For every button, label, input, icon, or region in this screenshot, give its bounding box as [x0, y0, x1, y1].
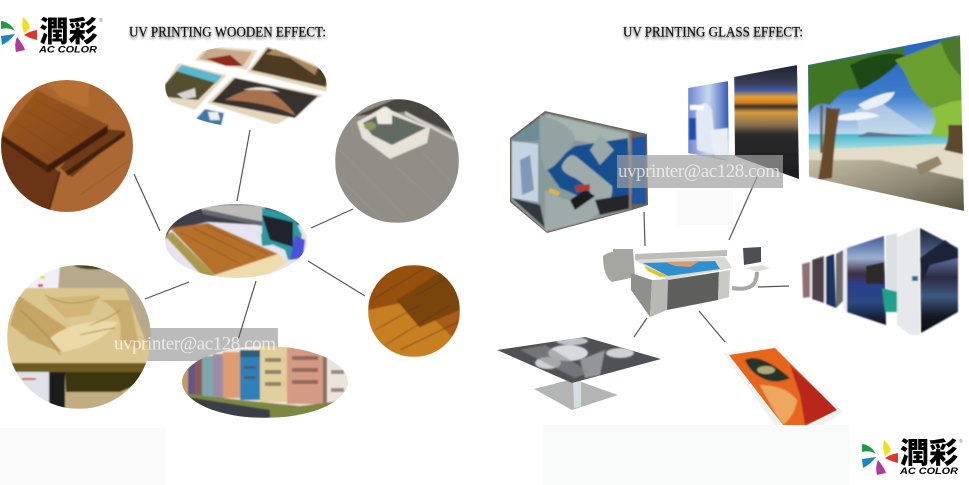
icon: pinwheel	[862, 440, 898, 475]
photo: framed wood prints oval	[165, 45, 330, 127]
faint patch bottom centre	[543, 425, 849, 485]
logo: AC COLOR top left	[1, 16, 103, 54]
photo: glass office room	[510, 111, 648, 233]
photo: glass panel sunset	[734, 65, 800, 180]
photo: printed glass table	[497, 337, 661, 410]
heading: wooden effect: UV PRINTING WOODEN EFFECT:	[129, 24, 326, 40]
faint patch bottom left	[0, 428, 166, 485]
photo: wooden planks circle	[0, 78, 136, 214]
heading: glass effect: UV PRINTING GLASS EFFECT:	[623, 24, 803, 40]
printer media	[643, 261, 720, 276]
connector lines: wooden	[134, 130, 365, 340]
logo wordmark: AC COLOR	[899, 466, 959, 476]
photo: flatbed UV printer	[603, 247, 770, 317]
photo: grey wood floor circle	[335, 99, 459, 223]
icon: pinwheel	[1, 17, 37, 52]
logo wordmark: AC COLOR	[38, 44, 98, 54]
photo: oak floor circle	[368, 265, 460, 357]
photo: glass partition corridor	[802, 227, 958, 335]
registered mark: ®	[99, 17, 103, 24]
printer arm	[732, 272, 757, 289]
photo: glass panel ice	[688, 81, 729, 161]
watermark text: uvprinter@ac128.com	[618, 161, 780, 182]
printer front panel	[667, 272, 719, 310]
monitor	[743, 247, 761, 265]
faint patch under right watermark	[677, 191, 733, 225]
logo characters: 潤彩	[40, 16, 98, 48]
photo: glass panel beach	[806, 35, 966, 212]
photo: printed glass portrait	[723, 345, 843, 427]
printer corner column	[650, 279, 668, 317]
watermark backing: left	[113, 328, 278, 361]
photo: carved relief circle	[7, 265, 151, 409]
logo characters: 潤彩	[900, 437, 958, 470]
registered mark: ®	[959, 438, 963, 445]
printer side panel	[631, 273, 652, 317]
printer print head	[603, 249, 635, 282]
photo: printer with wood board oval	[165, 204, 310, 279]
printer pillar	[718, 270, 730, 300]
keyboard tray	[746, 265, 770, 272]
logo: AC COLOR bottom right	[862, 437, 963, 476]
printer gantry	[635, 250, 727, 260]
connector lines: glass	[634, 177, 789, 342]
photo: printed wall panels oval	[180, 346, 349, 418]
watermark: right	[617, 155, 783, 188]
printer bed	[635, 257, 732, 280]
watermark overlay: left text: uvprinter@ac128.com	[114, 334, 276, 354]
